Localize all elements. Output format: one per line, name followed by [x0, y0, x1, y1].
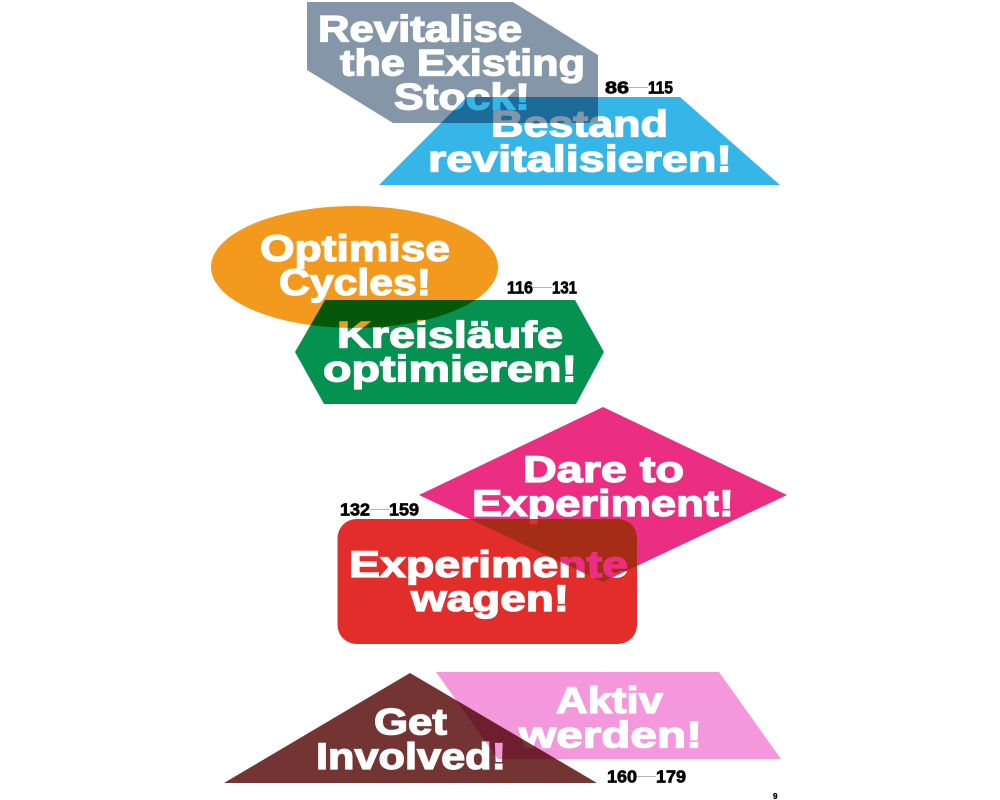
panel: Bestand revitalisieren: [379, 97, 780, 185]
panel: Kreisläufe optimieren: [295, 300, 604, 404]
panel: Revitalise the Existing Stock: [307, 2, 598, 123]
panel: Revitalise the Existing Stock: the Existing: [340, 42, 585, 84]
panel: Kreisläufe optimieren: Kreisläufe: [337, 314, 563, 356]
panel: Optimise Cycles: [211, 206, 498, 328]
page range: 86-115: 115: [648, 78, 673, 98]
panel: Dare to Experiment: [419, 407, 787, 582]
panel: Aktiv werden: [436, 672, 781, 759]
panel: Get Involved: Get: [374, 702, 447, 742]
panel: Aktiv werden: werden!: [518, 714, 702, 756]
page range: 160-179: 179: [656, 766, 686, 786]
page range: 86-115: [605, 78, 673, 98]
page range: 132-159: 159: [389, 500, 419, 520]
panel: Revitalise the Existing Stock: Stock!: [394, 76, 530, 118]
panel: Experimente wagen: Experimente: [349, 544, 628, 585]
page range: 116-131: 131: [552, 278, 577, 298]
page range: 116-131: 116: [507, 278, 533, 298]
panel: Experimente wagen: wagen!: [410, 578, 569, 619]
panel: Dare to Experiment: Experiment!: [472, 483, 734, 524]
panel: Get Involved: [224, 673, 597, 783]
page range: 86-115: 86: [605, 78, 629, 98]
panel: Bestand revitalisieren: revitalisieren!: [428, 138, 732, 180]
panel: Optimise Cycles: Optimise: [260, 228, 450, 269]
page range: 116-131: [507, 278, 577, 298]
page range: 132-159: [340, 500, 419, 520]
page range: 160-179: 160: [607, 766, 637, 786]
panel: Revitalise the Existing Stock: Revitalise: [318, 8, 522, 50]
panel: Optimise Cycles: Cycles!: [279, 262, 431, 303]
panel: Aktiv werden: Aktiv: [556, 680, 663, 721]
page range: 160-179: [607, 766, 686, 786]
panel: Get Involved: Involved!: [316, 736, 506, 777]
experiment panels with overlap: [338, 407, 787, 644]
panel: Dare to Experiment: Dare to: [523, 449, 684, 490]
panel: Experimente wagen: [338, 519, 637, 644]
page range: 132-159: 132: [340, 500, 370, 520]
panel: Bestand revitalisieren: Bestand: [491, 104, 668, 144]
panel: Kreisläufe optimieren: optimieren!: [323, 348, 577, 390]
